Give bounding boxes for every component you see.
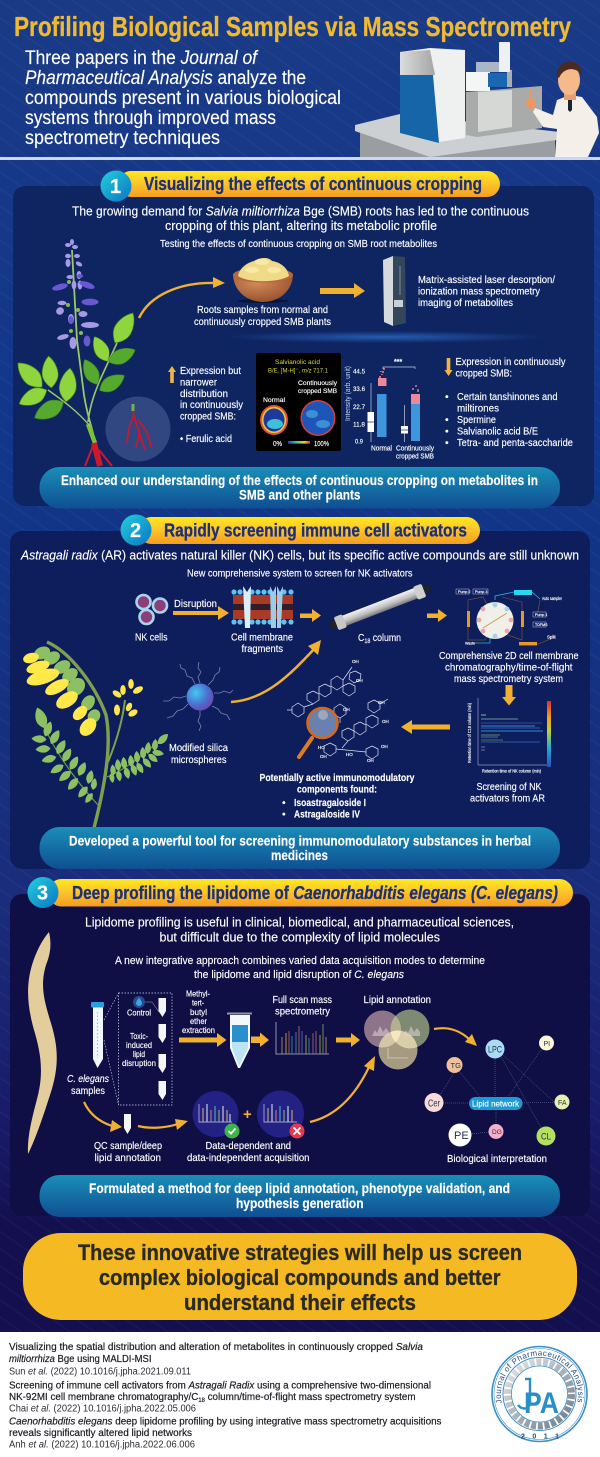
chart: mass spectrum: [276, 1022, 329, 1054]
section 2 heading: 2: [130, 520, 141, 542]
label: extraction: butyl: [190, 1007, 207, 1017]
arrow: system to heatmap: [502, 685, 516, 706]
references: Caenorhabditis elegans deep lipidome profiling by using integrative mass spectrometry acquisitions: [9, 1416, 441, 1428]
diagram: lipid network: TG: [450, 1061, 461, 1070]
intro text: systems through improved mass: [25, 108, 276, 129]
chart: intensity box plots: 11.8: [353, 422, 365, 428]
label: QC sample: QC sample/deep: [94, 1140, 162, 1152]
icon: molecules and magnifier: HO: [318, 745, 325, 750]
references: Screening of immune cell activators from Astragali Radix using a comprehensive two-dimensional: [9, 1380, 431, 1392]
label: control and toxic: lipid: [133, 1049, 145, 1059]
icon: C18 column: [328, 581, 432, 633]
text: increased expression: [180, 365, 244, 445]
label: immunomodulatory components: components found:: [297, 784, 377, 796]
diagram: lipid network: Cer: [428, 1098, 440, 1110]
icon: molecules and magnifier: OH: [367, 758, 374, 763]
label: screening: [470, 781, 545, 804]
label: C18 column: column: [370, 632, 401, 644]
subheading: integrative approach: [115, 955, 485, 981]
conclusion 3: [40, 1175, 560, 1217]
section 3 intro: [85, 914, 514, 944]
label: 2D system: [439, 650, 579, 685]
diagram: Venn of lipid annotation: [364, 1010, 430, 1070]
takeaway banner: These innovative strategies will help us screen: [78, 1240, 522, 1265]
conclusion 2: medicines: [271, 848, 328, 863]
label: immunomodulatory components: [260, 772, 415, 820]
arrow: disruption: [173, 606, 229, 620]
label: 2D system: mass spectrometry system: [454, 673, 563, 685]
arrow: membrane to column: [300, 609, 321, 622]
diagram: 2D chromatography system: Pump 3: [475, 590, 487, 594]
panel: MSI image: Normal: [263, 397, 286, 404]
text: decreased expression: Certain tanshinones and: [457, 391, 558, 403]
label: C. elegans samples: [67, 1073, 110, 1097]
conclusion 2: Developed a powerful tool for screening immunomodulatory substances in herbal: [69, 834, 531, 848]
section 2 intro: Astragali radix (AR) activates natural killer (NK) cells, but its specific active compounds are still unknown: [20, 548, 579, 562]
intro text: Pharmaceutical Analysis analyze the: [25, 68, 306, 89]
references: 18: [198, 1398, 206, 1404]
chart: intensity box plots: 22.7: [353, 404, 365, 411]
intro text: [25, 48, 341, 149]
diagram: 2D chromatography system: Waste: [465, 642, 475, 646]
references: Visualizing the spatial distribution and alteration of metabolites in continuously cropped Salvia: [9, 1342, 423, 1353]
diagram: lipid network: DG: [492, 1129, 502, 1136]
arrow: tube to spectrum: [251, 1032, 269, 1047]
caption: root samples: Roots samples from normal and: [197, 304, 328, 316]
arrow: annotation to network: [434, 1028, 477, 1046]
icon: molecules and magnifier: OH: [381, 744, 388, 749]
section 1 heading: 1: [110, 176, 121, 198]
label: extraction: [182, 988, 215, 1035]
text: increased expression: • Ferulic acid: [180, 433, 232, 445]
label: control and toxic: induced: [126, 1040, 152, 1050]
logo: Journal of Pharmaceutical Analysis: PA: [524, 1387, 559, 1420]
label: immunomodulatory components: •: [282, 808, 286, 820]
label: QC sample: lipid annotation: [94, 1152, 161, 1164]
icon: data-dependent acquisition: [192, 1091, 240, 1138]
label: full scan: spectrometry: [275, 1006, 331, 1018]
references: NK-92MI cell membrane chromatography/C: [9, 1392, 202, 1403]
label: C. elegans samples: samples: [71, 1085, 105, 1097]
icon: molecules and magnifier: OH: [356, 678, 363, 683]
references: Sun et al. (2022) 10.1016/j.jpha.2021.09.011: [9, 1366, 191, 1378]
icon: modified silica microsphere: [163, 662, 233, 731]
arrow: QC to acquisition: [138, 1119, 188, 1130]
icon: extraction tube: [227, 1012, 252, 1068]
icon: molecules and magnifier: HO: [346, 752, 353, 757]
text: decreased expression: •: [445, 437, 449, 449]
icon: cell membrane fragments: [231, 586, 294, 628]
panel: MSI image: Continuously: [298, 380, 338, 387]
section 1 heading: [100, 170, 500, 202]
logo: Journal of Pharmaceutical Analysis: 2 0 1 1: [521, 1434, 559, 1440]
references: Chai et al. (2022) 10.1016/j.jpha.2022.05.006: [9, 1404, 196, 1414]
section 3 intro: Lipidome profiling is useful in clinical, biomedical, and pharmaceutical sciences,: [85, 914, 514, 930]
diagram: lipid network: FA: [558, 1100, 567, 1107]
diagram: 2D chromatography system: Auto sampler: [542, 596, 562, 601]
icon: down arrow: [444, 358, 452, 376]
text: decreased expression: Spermine: [457, 414, 496, 426]
intro text: Three papers in the Journal of: [25, 48, 259, 69]
label: control and toxic: disruption: [122, 1058, 156, 1068]
label: 2D system: Comprehensive 2D cell membrane: [439, 650, 579, 662]
label: lipid annotation: Lipid annotation: [364, 994, 431, 1006]
diagram: lipid network: Lipid network: [472, 1098, 520, 1108]
intro text: spectrometry techniques: [25, 128, 220, 149]
label: control and toxic: [122, 1008, 156, 1068]
takeaway banner: complex biological compounds and better: [99, 1265, 501, 1290]
icon: bowl of root samples: [233, 258, 293, 303]
conclusion 1: SMB and other plants: [239, 488, 360, 502]
caption: MALDI imaging: ionization mass spectrometry: [418, 286, 541, 298]
arrow: silica to column: [231, 640, 321, 702]
subheading: integrative approach: A new integrative approach combines varied data acquisition modes to determine: [115, 955, 485, 967]
section 3 intro: but difficult due to the complexity of lipid molecules: [160, 930, 440, 944]
diagram: 2D chromatography system: Split: [547, 634, 556, 640]
references: miltiorrhiza Bge using MALDI-MSI: [9, 1354, 152, 1365]
text: decreased expression: Tetra- and penta-saccharide: [457, 437, 573, 449]
diagram: lipid network: PI: [544, 1041, 550, 1048]
icon: QC tube: [124, 1114, 131, 1134]
conclusion 1: Enhanced our understanding of the effects of continuous cropping on metabolites in: [61, 473, 538, 488]
text: decreased expression: Salvianolic acid B/E: [457, 426, 538, 438]
text: decreased expression: Expression in continuously: [456, 356, 566, 368]
label: membrane fragments: fragments: [242, 643, 283, 655]
label: full scan: Full scan mass: [272, 994, 332, 1006]
icon: MALDI instrument: [383, 256, 406, 326]
section 1 intro: [72, 204, 529, 233]
icon: molecules and magnifier: [287, 659, 389, 763]
diagram: lipid network: LPC: [488, 1044, 502, 1054]
text: increased expression: Expression but: [180, 365, 241, 377]
diagram: lipid network: [424, 1036, 570, 1146]
label: disruption: Disruption: [174, 598, 217, 610]
arrow: spectrum to annotation: [336, 1033, 360, 1047]
takeaway banner: [23, 1233, 577, 1320]
chart: intensity box plots: 0.9: [355, 438, 363, 446]
label: screening: activators from AR: [470, 792, 545, 804]
label: immunomodulatory components: Potentially active immunomodulatory: [260, 772, 415, 784]
text: increased expression: narrower: [180, 376, 217, 388]
chart: intensity box plots: Normal: [371, 446, 392, 452]
chart: intensity box plots: [345, 359, 434, 460]
label: membrane fragments: Cell membrane: [231, 632, 293, 644]
icon: control drop and small tubes: [133, 996, 166, 1100]
section 2 heading: Rapidly screening immune cell activators: [164, 520, 467, 540]
text: increased expression: distribution: [180, 388, 228, 400]
panel: MSI image: 100%: [314, 441, 329, 448]
text: increased expression: cropped SMB:: [180, 410, 236, 422]
label: acquisition: [187, 1140, 310, 1164]
logo: Journal of Pharmaceutical Analysis: Journal of Pharmaceutical Analysis: [496, 1351, 584, 1404]
label: extraction: Methyl-: [186, 988, 210, 998]
arrow: acquisition to annotation: [310, 1056, 375, 1122]
conclusion 2: [40, 827, 560, 869]
caption: MALDI imaging: Matrix-assisted laser desorption/: [418, 274, 555, 286]
chart: screening heatmap: Retention time of C18 column (min): [467, 702, 472, 763]
chart: intensity box plots: Continuously: [396, 446, 434, 452]
illustration: scientist: [526, 62, 599, 157]
references: Anh et al. (2022) 10.1016/j.jpha.2022.06.006: [9, 1440, 195, 1450]
diagram: lipid network: CL: [541, 1132, 551, 1142]
panel: MSI image: cropped SMB: [298, 388, 338, 395]
icon: root close-up: [106, 396, 170, 462]
caption: MALDI imaging: [418, 274, 555, 309]
text: decreased expression: •: [445, 414, 449, 426]
diagram: 2D chromatography system: Pump 1: [535, 613, 547, 617]
diagram: 2D chromatography system: Pump 2: [458, 590, 470, 594]
label: C. elegans samples: C. elegans: [67, 1073, 110, 1085]
icon: plus: +: [243, 1106, 252, 1123]
label: extraction: tert-: [192, 998, 204, 1008]
chart: intensity box plots: ***: [394, 359, 402, 366]
label: extraction: ether: [190, 1016, 207, 1026]
arrow: heatmap to compounds: [401, 720, 450, 734]
footer background: [0, 1332, 600, 1457]
chart: intensity box plots: Intensity (arb. unit): [345, 366, 352, 421]
conclusion 1: [40, 467, 560, 508]
references: [9, 1342, 441, 1450]
text: decreased expression: [445, 356, 573, 449]
label: modified silica: Modified silica: [169, 742, 228, 754]
caption: root samples: [194, 304, 331, 328]
icon: molecules and magnifier: OH: [352, 659, 359, 664]
panel: MSI image: [256, 353, 341, 451]
panel: MSI image: B/E, [M-H]⁻, m/z 717.1: [268, 368, 328, 374]
label: modified silica: [169, 742, 228, 766]
section 3 heading: 3: [37, 882, 48, 904]
panel: section 2: [10, 514, 590, 869]
section 1 intro: The growing demand for Salvia miltiorrhiza Bge (SMB) roots has led to the continuous: [72, 204, 529, 218]
label: C18 column: C: [358, 632, 366, 644]
label: immunomodulatory components: •: [282, 797, 286, 809]
label: biological interpretation: Biological interpretation: [447, 1153, 547, 1165]
chart: intensity box plots: 33.6: [353, 386, 365, 393]
illustration: mass spectrometer on bench: [355, 42, 560, 157]
icon: up arrow: [168, 366, 176, 383]
label: full scan: [272, 994, 332, 1018]
label: immunomodulatory components: Isoastragaloside I: [294, 797, 366, 809]
text: decreased expression: cropped SMB:: [456, 368, 512, 380]
subheading: testing: Testing the effects of continuous cropping on SMB root metabolites: [160, 239, 437, 250]
panel: MSI image: Salvianolic acid: [275, 359, 320, 366]
conclusion 3: Formulated a method for deep lipid annotation, phenotype validation, and: [89, 1181, 510, 1196]
text: increased expression: in continuously: [180, 399, 244, 411]
conclusion 3: hypothesis generation: [236, 1196, 364, 1211]
label: NK cells: NK cells: [135, 632, 168, 644]
caption: MALDI imaging: imaging of metabolites: [418, 297, 513, 309]
label: control and toxic: Toxic-: [130, 1031, 148, 1041]
icon: Astragalus plant: [22, 642, 170, 828]
icon: molecules and magnifier: OH: [378, 700, 385, 705]
arrow: column to system: [427, 609, 447, 622]
label: modified silica: microspheres: [171, 754, 226, 766]
diagram: 2D chromatography system: TOFMS: [535, 623, 548, 627]
label: control and toxic: Control: [127, 1008, 151, 1018]
label: 2D system: chromatography/time-of-flight: [445, 662, 573, 674]
arrow: samples to QC: [84, 1102, 122, 1132]
icon: molecules and magnifier: OH: [343, 707, 350, 712]
label: acquisition: Data-dependent and: [206, 1140, 291, 1152]
chart: screening heatmap: [467, 698, 551, 774]
references: column/time-of-flight mass spectrometry system: [205, 1392, 416, 1403]
section 1 heading: Visualizing the effects of continuous cropping: [144, 173, 482, 194]
section 2 heading: [120, 514, 480, 546]
section 3 heading: Deep profiling the lipidome of Caenorhabditis elegans (C. elegans): [72, 882, 558, 903]
section 1 intro: cropping of this plant, altering its metabolic profile: [165, 219, 437, 233]
text: decreased expression: •: [445, 426, 449, 438]
label: screening: Screening of NK: [476, 781, 542, 793]
subheading: NK system: New comprehensive system to screen for NK activators: [187, 568, 412, 580]
panel: section 1: [12, 170, 594, 508]
text: decreased expression: •: [445, 391, 449, 403]
label: C18 column: 18: [364, 638, 371, 645]
takeaway banner: understand their effects: [184, 1290, 416, 1315]
divider band: [0, 157, 600, 160]
panel: MSI image: 0%: [273, 441, 282, 448]
caption: root samples: continuously cropped SMB plants: [194, 316, 331, 328]
label: acquisition: data-independent acquisition: [187, 1152, 310, 1164]
label: membrane fragments: [231, 632, 293, 655]
icon: NK cells: [136, 595, 167, 624]
section 3 heading: [28, 877, 573, 908]
chart: intensity box plots: 44.5: [353, 368, 365, 376]
panel: section 3: [10, 877, 590, 1217]
references: reveals significantly altered lipid networks: [9, 1428, 192, 1439]
logo: Journal of Pharmaceutical Analysis: [491, 1346, 588, 1442]
chart: screening heatmap: Retention time of NK column (min): [482, 768, 542, 774]
text: decreased expression: miltirones: [457, 402, 499, 414]
subheading: integrative approach: the lipidome and lipid disruption of C. elegans: [194, 969, 405, 981]
icon: C. elegans worm: [28, 932, 57, 1154]
chart: intensity box plots: cropped SMB: [396, 454, 434, 460]
label: QC sample: [94, 1140, 162, 1164]
arrow: plant to roots: [139, 277, 225, 318]
arrow: extraction: [179, 1033, 226, 1047]
icon: molecules and magnifier: OH: [382, 719, 389, 724]
intro text: compounds present in various biological: [25, 88, 341, 109]
diagram: 2D chromatography system: [456, 589, 562, 646]
icon: molecules and magnifier: OH: [320, 754, 327, 759]
diagram: lipid network: PE: [454, 1130, 469, 1142]
icon: data-independent acquisition: [257, 1090, 304, 1138]
icon: Salvia plant: [12, 239, 140, 466]
label: immunomodulatory components: Astragaloside IV: [294, 808, 360, 820]
label: extraction: extraction: [182, 1025, 215, 1035]
icon: sample tube with dashed box: [91, 993, 172, 1105]
arrow: roots to imaging: [320, 283, 365, 298]
